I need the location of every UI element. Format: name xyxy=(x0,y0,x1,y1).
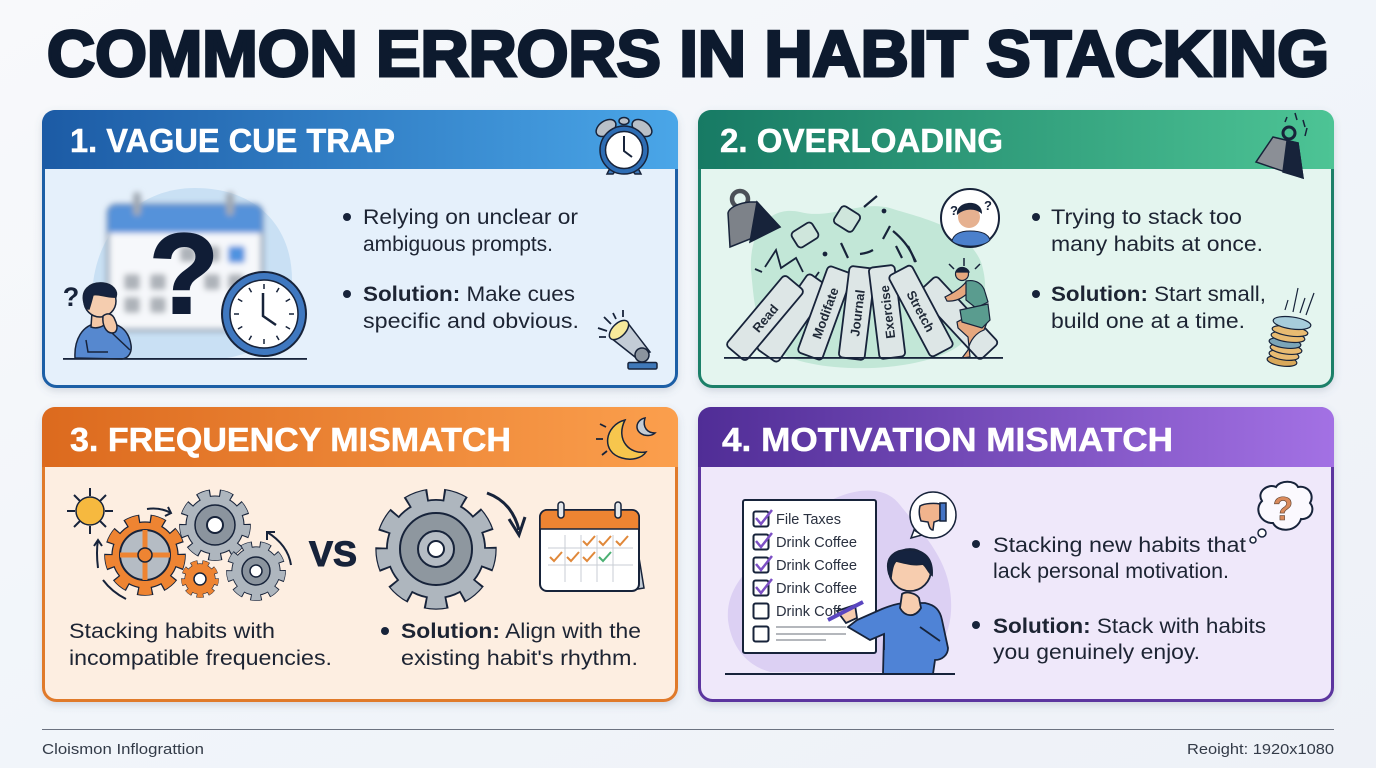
card body xyxy=(44,112,676,386)
icon: spotlight xyxy=(598,310,657,369)
domino: exercise: Exercise xyxy=(877,284,898,339)
card header xyxy=(42,407,678,467)
text: problem: lack personal motivation. xyxy=(993,560,1229,583)
text: solution xyxy=(381,620,641,670)
vs label: VS xyxy=(309,535,357,574)
checklist paper: File Taxes xyxy=(776,512,841,528)
heading: 4. MOTIVATION MISMATCH xyxy=(722,421,1173,458)
blob xyxy=(92,188,292,360)
blob xyxy=(728,490,951,672)
text: solution: Solution: Make cues xyxy=(363,283,575,306)
text: solution: Solution: Stack with habits xyxy=(993,615,1266,638)
thumbs down bubble xyxy=(910,492,956,538)
gear: orange large xyxy=(110,520,180,590)
text: problem xyxy=(343,206,578,256)
heading: 3. FREQUENCY MISMATCH xyxy=(70,421,511,458)
text: solution: build one at a time. xyxy=(1051,310,1245,333)
runner pushing xyxy=(945,268,990,358)
domino: stretch xyxy=(888,264,954,358)
domino: read xyxy=(725,274,805,362)
text: solution: specific and obvious. xyxy=(363,310,579,333)
person xyxy=(828,549,948,674)
blob xyxy=(751,206,985,368)
gear: big single xyxy=(384,497,488,601)
gear: orange small xyxy=(184,563,216,595)
person thinking xyxy=(75,283,131,359)
card body xyxy=(44,408,676,700)
checklist paper: Drink Coffee xyxy=(776,558,857,574)
card header xyxy=(698,110,1334,169)
text: solution: existing habit's rhythm. xyxy=(401,647,638,670)
ground line xyxy=(725,673,955,675)
card header xyxy=(698,407,1334,467)
gear: gray top xyxy=(184,494,246,556)
panel: 1 vague cue trap xyxy=(42,110,678,386)
domino: blank right xyxy=(917,275,999,361)
illustration: checklist and person xyxy=(725,490,956,675)
domino: modifate: Modifate xyxy=(809,285,842,341)
gear: gray right xyxy=(230,545,282,597)
icon: thought bubble xyxy=(1250,482,1312,543)
footer left: Cloismon Inflograttion xyxy=(42,741,204,758)
card header xyxy=(42,110,678,169)
checklist paper: Drink Coffee xyxy=(776,581,857,597)
checklist paper xyxy=(743,500,876,653)
panel: 2 overloading xyxy=(698,110,1334,386)
text: problem: Trying to stack too xyxy=(1051,206,1242,229)
text: solution: Solution: Align with the xyxy=(401,620,641,643)
domino: blank xyxy=(756,273,830,363)
domino: journal xyxy=(838,266,876,360)
icon: thought bubble: ? xyxy=(1273,490,1293,527)
text: solution xyxy=(972,615,1266,664)
text: problem: incompatible frequencies. xyxy=(69,647,332,670)
card body xyxy=(700,408,1332,700)
heading: 1. VAGUE CUE TRAP xyxy=(70,122,395,159)
text: problem: Relying on unclear or xyxy=(363,206,578,229)
icon: alarm clock xyxy=(593,116,655,174)
card body xyxy=(700,112,1332,386)
illustration: mismatched gears xyxy=(67,488,291,599)
calendar with checks xyxy=(540,502,644,591)
text: solution: you genuinely enjoy. xyxy=(993,641,1200,664)
footer right: Reoight: 1920x1080 xyxy=(1187,741,1334,758)
title: COMMON ERRORS IN HABIT STACKING xyxy=(47,17,1329,90)
text: problem: ambiguous prompts. xyxy=(363,233,553,256)
icon: falling weight xyxy=(1256,113,1307,178)
clock xyxy=(222,272,306,356)
panel: 4 motivation mismatch xyxy=(698,407,1334,700)
small question mark: ? xyxy=(63,282,79,312)
heading: 2. OVERLOADING xyxy=(720,122,1003,159)
footer divider xyxy=(42,729,1334,730)
domino: modifate xyxy=(797,265,853,361)
checklist paper: Drink Coffee xyxy=(776,535,857,551)
checklist paper: Drink Coffee xyxy=(776,604,857,620)
thought portrait: ? xyxy=(984,198,992,213)
text: problem xyxy=(972,534,1246,583)
big question mark: ? xyxy=(149,211,219,338)
text: problem xyxy=(1032,206,1263,256)
icon: moons xyxy=(596,418,655,459)
ground line xyxy=(63,358,307,360)
text: problem xyxy=(69,620,332,670)
text: problem: many habits at once. xyxy=(1051,233,1263,256)
thought portrait xyxy=(941,189,999,247)
weight xyxy=(728,191,780,247)
flying debris xyxy=(755,196,916,279)
text: solution: Solution: Start small, xyxy=(1051,283,1266,306)
text: problem: Stacking new habits that xyxy=(993,534,1246,557)
text: solution xyxy=(1032,283,1266,333)
illustration: toppling dominoes xyxy=(724,189,1003,368)
domino: journal: Journal xyxy=(847,289,868,337)
illustration: blurred calendar and clock xyxy=(63,188,307,360)
strain marks xyxy=(949,258,980,269)
text: problem: Stacking habits with xyxy=(69,620,275,643)
sun xyxy=(67,488,113,534)
domino: exercise xyxy=(868,265,906,359)
rotation arrows xyxy=(94,507,291,599)
domino: stretch: Stretch xyxy=(903,288,938,335)
ground line xyxy=(724,357,1003,359)
panel: 3 frequency mismatch xyxy=(42,407,678,700)
thought portrait: ? xyxy=(950,203,958,218)
arrow to calendar xyxy=(487,493,525,535)
text: solution xyxy=(343,283,579,333)
icon: coin stack xyxy=(1266,288,1314,368)
domino: read: Read xyxy=(749,301,781,335)
blurred calendar xyxy=(108,192,262,330)
